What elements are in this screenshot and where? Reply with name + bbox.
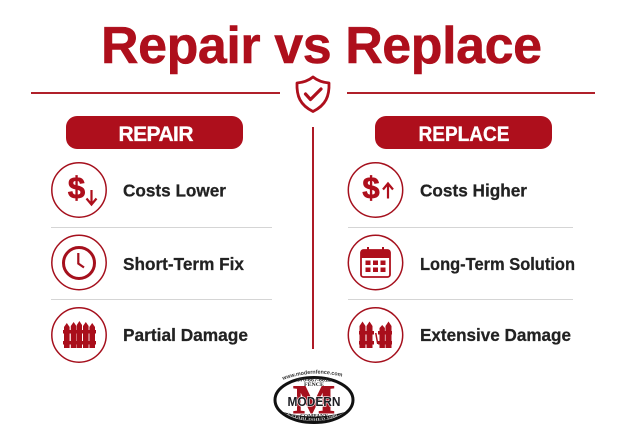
icon: calendar [348,235,403,290]
label: Costs Lower [123,180,226,200]
row: costs lower [52,163,226,217]
label: Extensive Damage [420,325,571,345]
logo: modern fence company: M [293,377,335,422]
logo: modern fence company: www.modernfence.com [282,370,342,380]
title rule right [347,92,595,94]
title: Repair vs Replace [101,17,542,75]
label: Short-Term Fix [123,254,244,274]
label: Long-Term Solution [420,254,575,274]
icon: dollar up: $ [362,170,380,205]
icon: dollar down [52,163,106,217]
row: costs higher [348,163,527,217]
row: short-term fix [52,235,244,290]
logo: modern fence company: ESTABLISHED 1990 [287,412,337,421]
icon: shield check [297,77,329,112]
center divider [312,127,314,349]
panel: repair [51,116,272,362]
repair badge: REPAIR [118,123,194,146]
icon: dollar up [348,163,403,217]
icon: broken fence [348,308,403,362]
row: long-term solution [348,235,575,290]
label: Costs Higher [420,180,527,200]
panel: replace [348,116,575,362]
logo: modern fence company [274,370,354,424]
logo: modern fence company: COMPANY [300,414,329,420]
replace badge [375,116,552,149]
row: partial damage [52,308,248,362]
repair badge [66,116,243,149]
logo: modern fence company: FENCE [304,383,325,388]
icon: clock [52,235,106,290]
label: Partial Damage [123,325,248,345]
title rule left [31,92,280,94]
row: extensive damage [348,308,571,362]
icon: dollar down: $ [68,170,85,205]
logo dark lower band [283,412,345,421]
logo: modern fence company: 970-667-6612 [297,378,332,382]
icon: fence [52,308,106,362]
replace badge: REPLACE [418,123,510,146]
logo: modern fence company: MODERN [288,394,340,409]
